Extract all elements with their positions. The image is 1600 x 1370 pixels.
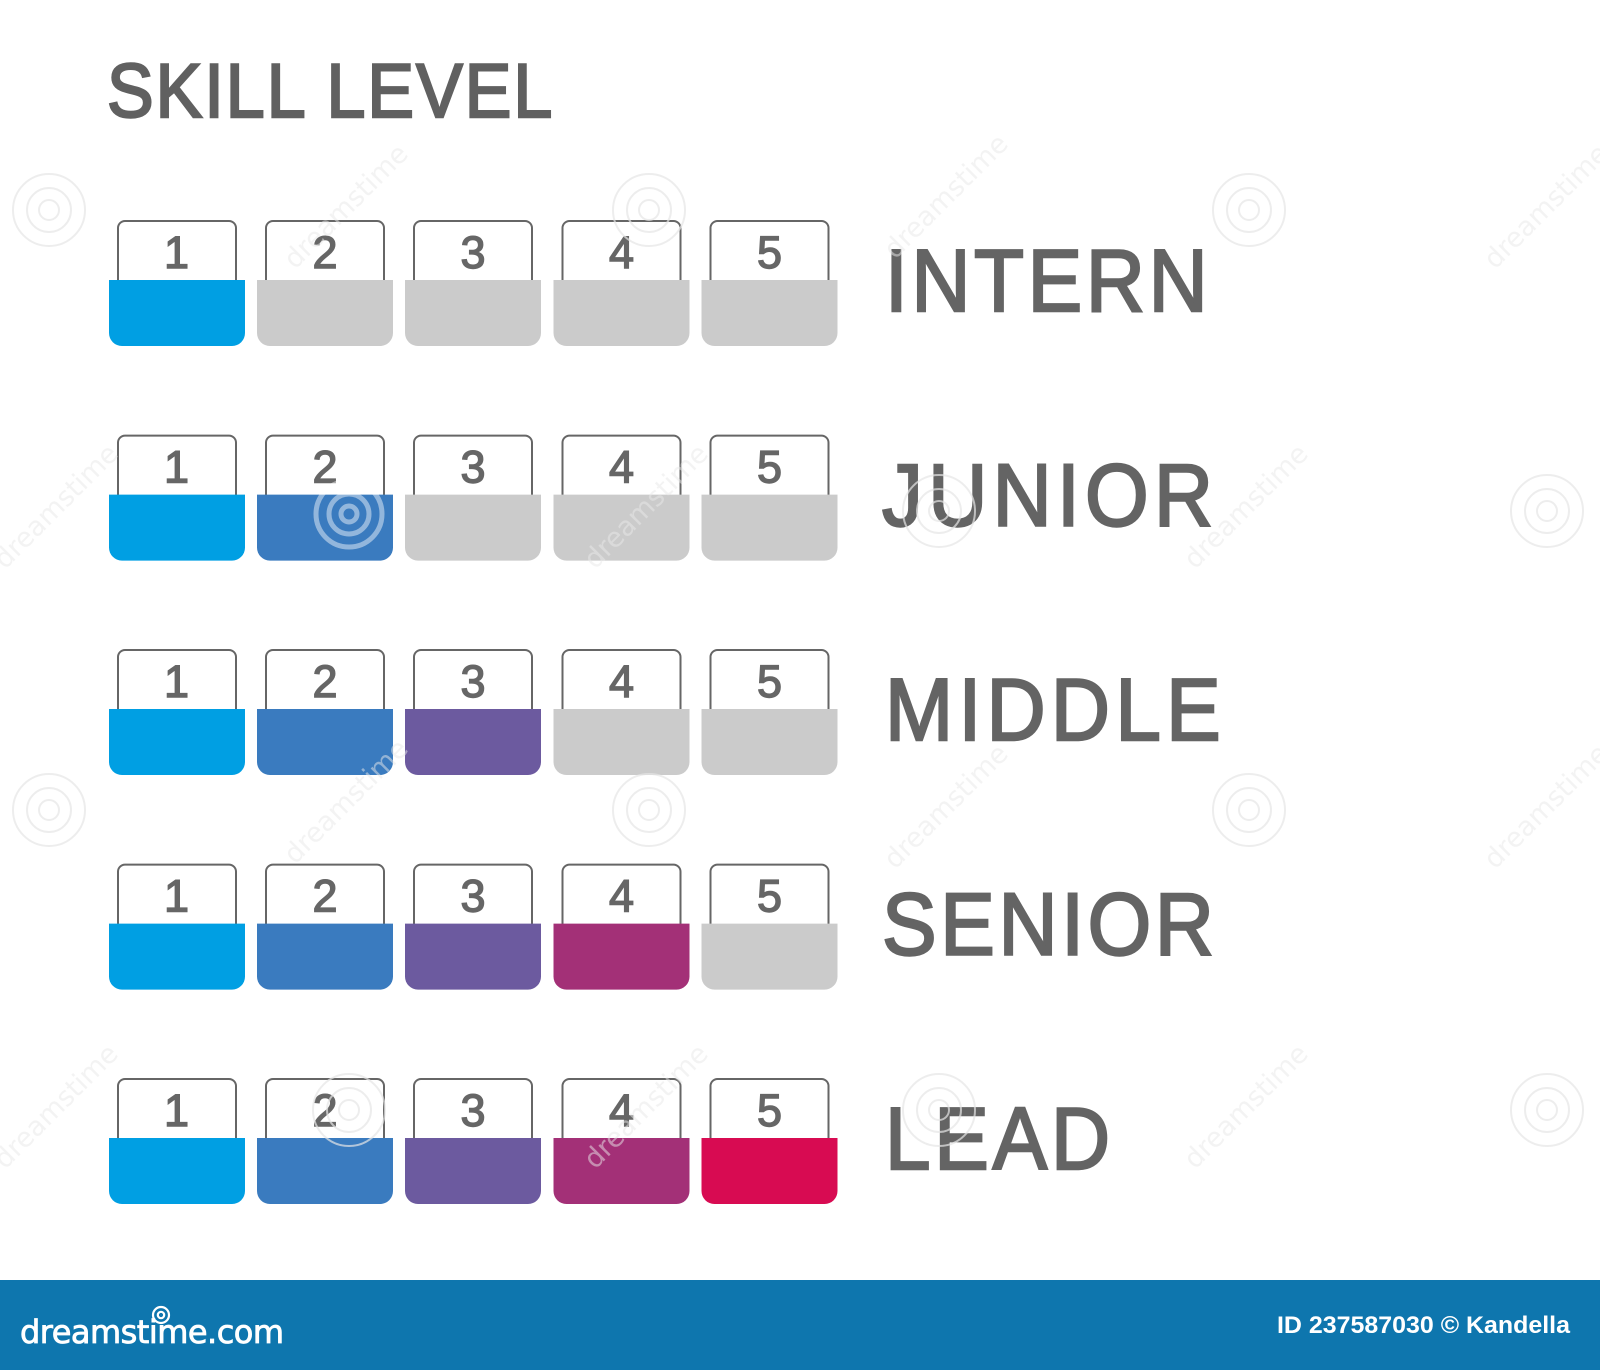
label: lead: LEAD xyxy=(885,1090,1110,1189)
level 3 empty xyxy=(405,221,541,346)
level 1 filled: 1 xyxy=(164,656,189,707)
watermark overlay xyxy=(0,128,1600,1175)
footer credit: ID 237587030 © Kandella xyxy=(1277,1312,1571,1339)
level 5 empty: 5 xyxy=(757,656,782,707)
level 3 filled: 3 xyxy=(460,871,486,922)
level 5 empty xyxy=(702,865,838,990)
level 1 filled: 1 xyxy=(164,227,189,278)
watermark overlay: dreamstime xyxy=(878,738,1015,875)
level 4 filled xyxy=(554,1079,690,1204)
level 5 empty xyxy=(702,221,838,346)
level 2 filled: 2 xyxy=(312,442,338,493)
level 4 empty: 4 xyxy=(609,442,634,493)
row: intern xyxy=(109,221,1208,346)
level 4 empty xyxy=(554,436,690,561)
row: senior xyxy=(109,865,1214,990)
row: junior xyxy=(109,436,1213,561)
level 3 filled: 3 xyxy=(460,1085,486,1136)
level 2 filled xyxy=(257,436,393,561)
level 2 filled xyxy=(257,650,393,775)
level 1 filled xyxy=(109,865,245,990)
level 5 empty xyxy=(702,436,838,561)
level 3 empty: 3 xyxy=(460,227,486,278)
level 1 filled: 1 xyxy=(164,871,189,922)
level 5 empty: 5 xyxy=(757,871,782,922)
level 3 filled xyxy=(405,1079,541,1204)
level 2 filled: 2 xyxy=(312,1085,338,1136)
level 1 filled xyxy=(109,1079,245,1204)
level 1 filled xyxy=(109,436,245,561)
level 3 filled: 3 xyxy=(460,656,486,707)
level 2 filled xyxy=(257,1079,393,1204)
level 1 filled xyxy=(109,221,245,346)
level 3 empty xyxy=(405,436,541,561)
level 3 filled xyxy=(405,650,541,775)
footer bar xyxy=(0,1280,1600,1370)
level 1 filled: 1 xyxy=(164,1085,189,1136)
level 2 filled: 2 xyxy=(312,871,338,922)
level 4 empty: 4 xyxy=(609,656,634,707)
level 4 empty xyxy=(554,221,690,346)
watermark overlay: dreamstime xyxy=(578,1038,715,1175)
title: SKILL LEVEL xyxy=(107,49,552,134)
label: middle: MIDDLE xyxy=(885,661,1221,760)
level 2 filled xyxy=(257,865,393,990)
watermark overlay: dreamstime xyxy=(1178,1038,1315,1175)
row: middle xyxy=(109,650,1221,775)
level 2 empty xyxy=(257,221,393,346)
label: senior: SENIOR xyxy=(882,876,1214,974)
level 4 filled: 4 xyxy=(609,1085,634,1136)
footer logo text: dreamstime.com xyxy=(20,1313,284,1351)
watermark overlay: dreamstime xyxy=(278,733,415,870)
label: intern: INTERN xyxy=(885,232,1208,331)
level 3 empty: 3 xyxy=(460,442,486,493)
watermark overlay: dreamstime xyxy=(1178,438,1315,575)
level 5 filled xyxy=(702,1079,838,1204)
row: lead xyxy=(109,1079,1110,1204)
level 4 filled xyxy=(554,865,690,990)
level 5 empty: 5 xyxy=(757,442,782,493)
level 2 filled: 2 xyxy=(312,656,338,707)
level 1 filled xyxy=(109,650,245,775)
level 1 filled: 1 xyxy=(164,442,189,493)
level 5 empty xyxy=(702,650,838,775)
level 2 empty: 2 xyxy=(312,227,338,278)
level 4 filled: 4 xyxy=(609,871,634,922)
watermark overlay: dreamstime xyxy=(278,138,415,275)
level 5 empty: 5 xyxy=(757,227,782,278)
icon: spiral logo xyxy=(153,1307,169,1323)
watermark overlay: dreamstime xyxy=(578,438,715,575)
watermark overlay: dreamstime xyxy=(878,128,1015,265)
level 4 empty: 4 xyxy=(609,227,634,278)
label: junior: JUNIOR xyxy=(882,447,1213,545)
level 3 filled xyxy=(405,865,541,990)
level 5 filled: 5 xyxy=(757,1085,782,1136)
level 4 empty xyxy=(554,650,690,775)
